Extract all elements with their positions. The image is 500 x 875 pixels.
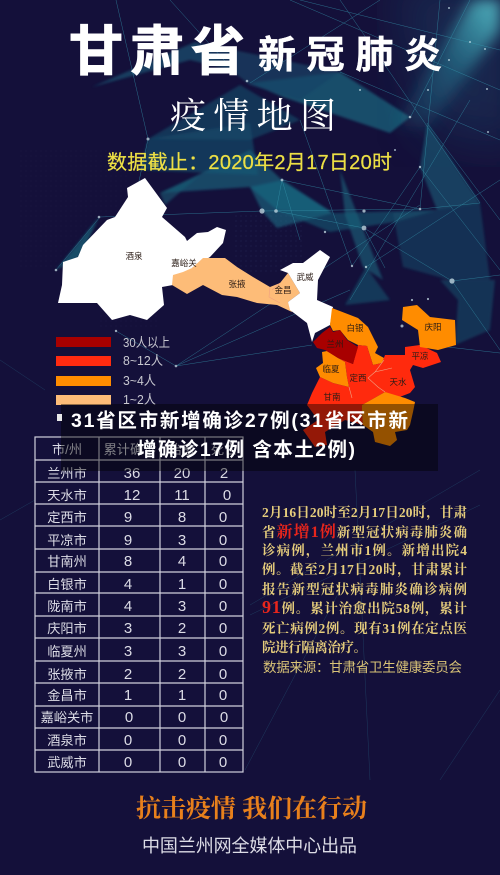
table rows: 3 bbox=[124, 643, 132, 660]
table rows: 9 bbox=[124, 509, 132, 526]
data cutoff date: 数据截止：2020年2月17日20时 bbox=[107, 146, 392, 175]
table rows: 8 bbox=[178, 509, 186, 526]
title: 甘肃省: 甘肃省 bbox=[69, 22, 245, 82]
map labels: 酒泉 bbox=[125, 251, 143, 261]
table rows: 2 bbox=[124, 666, 132, 683]
map labels: 临夏 bbox=[322, 364, 340, 374]
map labels: 定西 bbox=[349, 373, 367, 383]
summary text block: 数据来源：甘肃省卫生健康委员会 bbox=[263, 656, 462, 676]
table rows: 兰州市 bbox=[47, 465, 87, 481]
table header bbox=[52, 441, 237, 457]
map legend: 1~2人 bbox=[123, 392, 156, 407]
map labels: 天水 bbox=[389, 377, 407, 387]
table rows: 临夏州 bbox=[47, 644, 87, 659]
table rows: 3 bbox=[178, 598, 186, 615]
summary text block: 死亡病例2例。现有31例在定点医 bbox=[262, 620, 468, 636]
slogan: 抗击疫情 我们在行动 bbox=[136, 795, 367, 823]
region: 武威 bbox=[280, 250, 333, 342]
table rows: 0 bbox=[223, 487, 231, 504]
summary text block: 报告新型冠状病毒肺炎确诊病例 bbox=[262, 581, 467, 597]
data table bbox=[35, 437, 243, 772]
region: 张掖 and 金昌 bbox=[172, 258, 300, 312]
map legend: 3~4人 bbox=[123, 373, 156, 388]
summary text block: 院进行隔离治疗。 bbox=[262, 639, 367, 655]
region: 白银 bbox=[330, 308, 384, 365]
table rows: 2 bbox=[178, 666, 186, 683]
table rows: 20 bbox=[174, 465, 190, 482]
region boundaries bbox=[269, 283, 392, 398]
table rows: 8 bbox=[124, 553, 132, 570]
table rows: 1 bbox=[124, 687, 132, 704]
table rows: 9 bbox=[124, 532, 132, 549]
summary text block bbox=[262, 504, 468, 676]
map of Gansu bbox=[58, 178, 456, 447]
table rows: 4 bbox=[178, 553, 186, 570]
headline overlay banner: 31省区市新增确诊27例(31省区市新 bbox=[71, 409, 408, 432]
table rows: 0 bbox=[219, 643, 227, 660]
table rows: 3 bbox=[178, 643, 186, 660]
table rows: 甘南州 bbox=[47, 554, 87, 569]
table rows: 0 bbox=[178, 732, 186, 749]
table rows: 2 bbox=[178, 620, 186, 637]
table rows: 嘉峪关市 bbox=[41, 709, 93, 725]
table rows: 平凉市 bbox=[47, 532, 87, 548]
table header: 治愈 bbox=[169, 442, 195, 457]
table rows: 3 bbox=[178, 532, 186, 549]
map labels: 金昌 bbox=[274, 285, 292, 295]
map labels: 张掖 bbox=[228, 279, 246, 289]
table rows: 天水市 bbox=[47, 487, 87, 503]
table rows: 4 bbox=[124, 598, 132, 615]
table rows: 0 bbox=[125, 709, 133, 726]
table rows: 11 bbox=[174, 487, 190, 504]
map labels: 武威 bbox=[296, 272, 314, 282]
table rows: 1 bbox=[178, 576, 186, 593]
table rows: 0 bbox=[219, 576, 227, 593]
map labels: 庆阳 bbox=[424, 322, 442, 332]
table rows: 3 bbox=[124, 620, 132, 637]
table rows: 酒泉市 bbox=[47, 732, 87, 748]
map labels: 甘南 bbox=[323, 392, 341, 402]
map labels: 平凉 bbox=[411, 351, 429, 361]
table rows: 0 bbox=[219, 754, 227, 771]
table rows: 0 bbox=[124, 732, 132, 749]
region: 庆阳 bbox=[402, 305, 456, 350]
table rows: 金昌市 bbox=[47, 687, 87, 703]
map labels: 白银 bbox=[346, 323, 364, 333]
subtitle: 疫情地图: 疫情地图 bbox=[170, 96, 336, 136]
map labels: 嘉峪关 bbox=[171, 258, 197, 268]
table rows: 0 bbox=[219, 509, 227, 526]
map legend bbox=[56, 335, 170, 407]
table rows: 张掖市 bbox=[47, 666, 87, 682]
summary text block: 例。截至2月17日20时，甘肃累计 bbox=[262, 561, 468, 578]
table rows bbox=[41, 465, 231, 771]
table rows: 2 bbox=[220, 465, 228, 482]
table rows: 庆阳市 bbox=[47, 620, 87, 636]
map labels bbox=[125, 251, 442, 402]
headline overlay banner bbox=[57, 404, 438, 471]
table header: 累计确诊 bbox=[104, 442, 156, 457]
table rows: 0 bbox=[219, 532, 227, 549]
light cone from top right bbox=[395, 0, 500, 128]
table rows: 武威市 bbox=[47, 754, 87, 770]
table rows: 0 bbox=[124, 754, 132, 771]
table rows: 0 bbox=[219, 598, 227, 615]
network mesh background bbox=[56, 42, 495, 345]
map legend: 8~12人 bbox=[123, 353, 163, 368]
table rows: 0 bbox=[219, 732, 227, 749]
summary text block: 91例。累计治愈出院58例，累计 bbox=[262, 597, 468, 617]
table rows: 1 bbox=[178, 687, 186, 704]
table header: 市/州 bbox=[52, 441, 82, 457]
table rows: 4 bbox=[124, 576, 132, 593]
table rows: 0 bbox=[219, 620, 227, 637]
title: 新冠肺炎: 新冠肺炎 bbox=[258, 35, 442, 77]
table rows: 0 bbox=[178, 754, 186, 771]
table rows: 陇南市 bbox=[47, 598, 87, 614]
table rows: 0 bbox=[220, 709, 228, 726]
region: 酒泉 and 嘉峪关 bbox=[58, 178, 226, 320]
region: 兰州 bbox=[313, 327, 358, 364]
table rows: 36 bbox=[124, 465, 140, 482]
headline overlay banner: 增确诊17例 含本土2例) bbox=[137, 438, 355, 461]
map legend: 30人以上 bbox=[123, 335, 170, 350]
map labels: 兰州 bbox=[326, 339, 344, 349]
summary text block: 省新增1例新型冠状病毒肺炎确 bbox=[262, 523, 468, 541]
table rows: 白银市 bbox=[47, 576, 87, 592]
table header: 死亡 bbox=[211, 442, 237, 457]
table rows: 0 bbox=[219, 553, 227, 570]
region: 临夏 bbox=[316, 351, 349, 387]
table rows: 0 bbox=[219, 687, 227, 704]
table rows: 12 bbox=[124, 487, 140, 504]
region: 陇南 bbox=[362, 392, 415, 446]
table rows: 0 bbox=[178, 709, 186, 726]
summary text block: 2月16日20时至2月17日20时，甘肃 bbox=[262, 504, 468, 521]
table rows: 定西市 bbox=[47, 509, 87, 525]
publisher credit: 中国兰州网全媒体中心出品 bbox=[142, 836, 357, 856]
summary text block: 诊病例，兰州市1例。新增出院4 bbox=[262, 542, 467, 559]
table rows: 0 bbox=[219, 666, 227, 683]
region: 定西 天水 甘南 平凉 bbox=[303, 345, 441, 447]
